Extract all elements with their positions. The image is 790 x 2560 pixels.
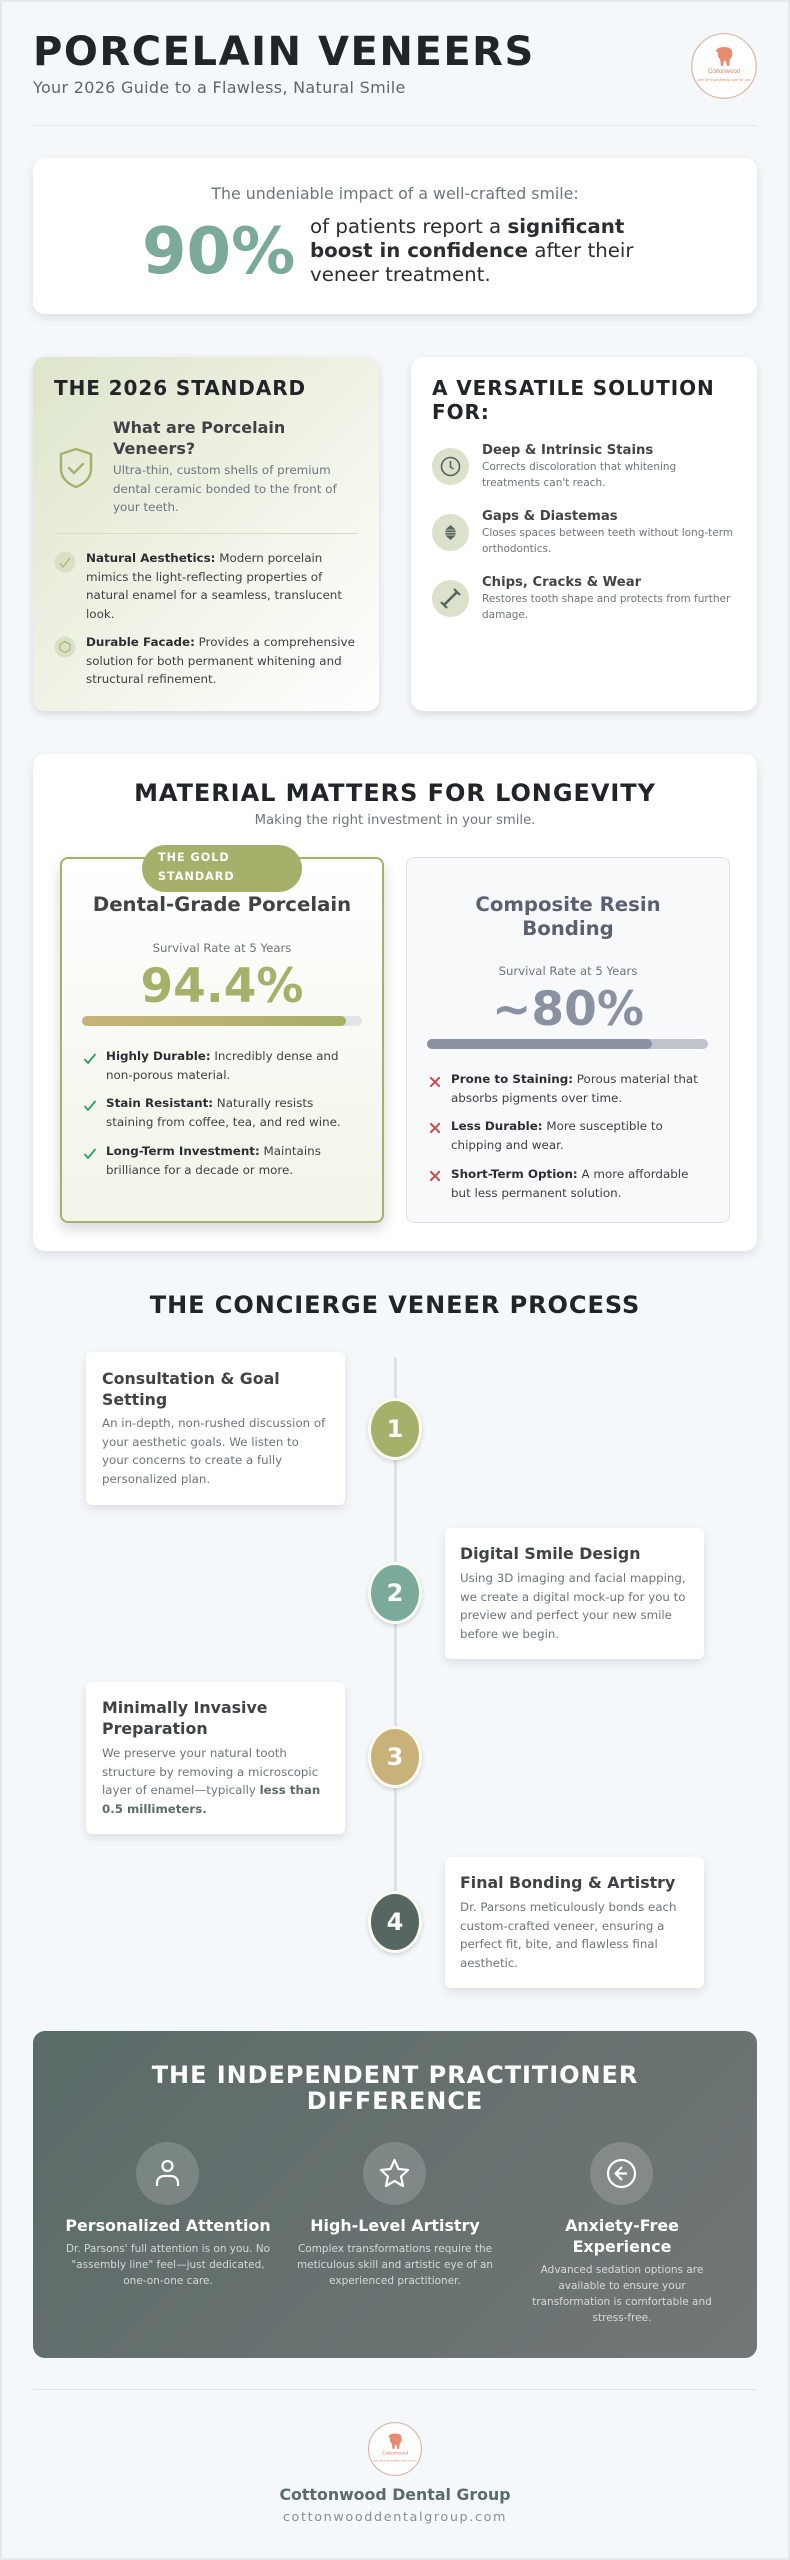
- step 4 text: [460, 1900, 677, 1970]
- drawback: [451, 1167, 688, 1200]
- benefit title: anxiety-free: Anxiety-Free: [565, 2216, 679, 2235]
- item: chips: Chips, Cracks & Wear: [482, 575, 641, 590]
- icon: circled arrow: [590, 2142, 653, 2205]
- porcelain survival label: Survival Rate at 5 Years: [153, 941, 291, 955]
- step 3 text: We preserve your natural tooth: [102, 1746, 287, 1760]
- panel: versatile solution: [411, 357, 757, 711]
- step 2 number: 2: [387, 1579, 403, 1607]
- cross mark: [430, 1077, 440, 1087]
- drawback: chipping and wear.: [451, 1138, 564, 1152]
- composite drawbacks list: [430, 1072, 698, 1200]
- point: natural aesthetics: Natural Aesthetics: Modern porcelain: [86, 551, 322, 565]
- icon: gaps: [432, 514, 469, 551]
- logo: Cottonwood Dental footer: Cottonwood: [382, 2451, 408, 2457]
- benefit: Stain Resistant: Naturally resists: [106, 1096, 313, 1110]
- check mark: [84, 1053, 96, 1064]
- point: natural aesthetics: [86, 551, 342, 620]
- hero statement: of patients report a significant: [310, 215, 624, 238]
- benefit text: anxiety-free: Advanced sedation options are: [541, 2264, 703, 2276]
- step 4 text: aesthetic.: [460, 1956, 518, 1970]
- benefit text: attention: one-on-one care.: [123, 2275, 213, 2287]
- step 3 title: [102, 1698, 267, 1738]
- benefit text: artistry: Complex transformations require the: [298, 2243, 492, 2255]
- hero lead-in: The undeniable impact of a well-crafted smile:: [211, 184, 579, 203]
- definition text: dental ceramic bonded to the front of: [113, 482, 337, 496]
- point: durable facade: structural refinement.: [86, 672, 216, 686]
- composite title: Composite Resin: [475, 893, 661, 916]
- step 3 card: [86, 1682, 345, 1834]
- panel heading: THE INDEPENDENT PRACTITIONER: [152, 2061, 638, 2089]
- icon: hexagon badge: [54, 636, 76, 658]
- porcelain bar: [82, 1016, 362, 1026]
- panel: material comparison: [33, 754, 757, 1251]
- step 2 text: preview and perfect your new smile: [460, 1608, 672, 1622]
- step 3 number: [368, 1726, 422, 1788]
- benefit text: anxiety-free: available to ensure your: [558, 2280, 686, 2292]
- cross mark: [430, 1171, 440, 1181]
- porcelain 94.4%: 94.4%: [140, 959, 304, 1014]
- benefit: Highly Durable: Incredibly dense and: [106, 1049, 338, 1063]
- point: natural aesthetics: look.: [86, 606, 115, 620]
- logo: Cottonwood Dental header: [691, 33, 757, 99]
- heading: THE 2026 STANDARD: [54, 376, 306, 400]
- heading: A VERSATILE SOLUTION: [432, 376, 715, 400]
- panel: dental-grade porcelain: [60, 857, 384, 1223]
- panel heading: DIFFERENCE: [307, 2087, 483, 2115]
- step 4 title: Final Bonding & Artistry: [460, 1873, 675, 1892]
- logo: Cottonwood Dental footer: [368, 2422, 422, 2476]
- hero 90% number: 90%: [142, 215, 295, 289]
- step 1 number: [368, 1398, 422, 1460]
- benefit title: attention: Personalized Attention: [65, 2216, 271, 2235]
- timeline line: [394, 1357, 397, 1932]
- subheading: Veneers?: [113, 439, 195, 458]
- header subtitle: Your 2026 Guide to a Flawless, Natural Smile: [33, 78, 406, 97]
- item: chips description: Restores tooth shape and protects from further: [482, 593, 730, 605]
- step 3 text: [102, 1746, 320, 1816]
- porcelain benefits list: [84, 1049, 341, 1176]
- item: gaps description: [482, 527, 733, 555]
- cross mark: [430, 1123, 440, 1133]
- benefit: brilliance for a decade or more.: [106, 1162, 293, 1176]
- benefit text: attention: Dr. Parsons' full attention is on you. No: [66, 2243, 270, 2255]
- benefit text: anxiety-free: stress-free.: [593, 2312, 651, 2324]
- step 2 card: [445, 1528, 704, 1659]
- item: gaps: Gaps & Diastemas: [482, 509, 618, 524]
- benefit: staining from coffee, tea, and red wine.: [106, 1114, 341, 1128]
- point: durable facade: solution for both permanent whitening and: [86, 654, 342, 668]
- step 2 text: we create a digital mock-up for you to: [460, 1590, 685, 1604]
- item: chips description: damage.: [482, 609, 528, 621]
- benefit text: anxiety-free: transformation is comfortable and: [532, 2296, 712, 2308]
- icon: check badge: [54, 552, 76, 572]
- panel: hero statistic: [33, 158, 757, 314]
- icon: chips: [432, 580, 469, 617]
- step 1 title: [102, 1369, 280, 1409]
- point: natural aesthetics: natural enamel for a seamless, translucent: [86, 588, 342, 602]
- badge: the gold standard: THE GOLD: [158, 851, 230, 864]
- check mark: [84, 1100, 96, 1111]
- benefit: non-porous material.: [106, 1068, 230, 1082]
- benefit text: attention: "assembly line" feel—just dedicated,: [71, 2259, 265, 2271]
- step 3 text: layer of enamel—typically less than: [102, 1783, 320, 1797]
- step 4 number: [368, 1891, 422, 1953]
- badge: the gold standard: STANDARD: [158, 870, 235, 882]
- benefit: Long-Term Investment: Maintains: [106, 1144, 321, 1158]
- drawback: Short-Term Option: A more affordable: [451, 1167, 688, 1181]
- item: stains: Deep & Intrinsic Stains: [482, 443, 653, 458]
- subheading: Making the right investment in your smile.: [255, 813, 535, 828]
- definition text: your teeth.: [113, 500, 179, 514]
- step 3 number: 3: [387, 1743, 403, 1771]
- item: chips description: [482, 593, 730, 621]
- footer url: cottonwooddentalgroup.com: [283, 2510, 507, 2525]
- subheading: [113, 418, 285, 458]
- step 2 text: [460, 1571, 686, 1640]
- hero statement: veneer treatment.: [310, 263, 491, 286]
- item: stains description: Corrects discoloration that whitening: [482, 461, 676, 473]
- step 1 card: [86, 1352, 345, 1505]
- item: gaps description: orthodontics.: [482, 543, 551, 555]
- step 2 text: before we begin.: [460, 1626, 559, 1640]
- step 3 text: structure by removing a microscopic: [102, 1764, 318, 1778]
- step 2 number: [368, 1562, 422, 1624]
- panel heading: [152, 2061, 638, 2115]
- benefit: [106, 1049, 338, 1082]
- heading: [432, 376, 715, 424]
- step 1 title: Setting: [102, 1390, 167, 1409]
- point: durable facade: Durable Facade: Provides a comprehensive: [86, 635, 355, 649]
- benefit text: artistry: [297, 2243, 493, 2287]
- heading: FOR:: [432, 400, 490, 424]
- badge: the gold standard: [142, 845, 302, 892]
- hero statement: [310, 215, 634, 286]
- step 1 text: your concerns to create a fully: [102, 1453, 282, 1467]
- logo: Cottonwood Dental header: Cottonwood: [708, 69, 740, 75]
- step 4 number: 4: [387, 1908, 403, 1936]
- benefit text: artistry: meticulous skill and artistic eye of an: [297, 2259, 493, 2271]
- step 1 text: your aesthetic goals. We listen to: [102, 1434, 299, 1448]
- heading: MATERIAL MATTERS FOR LONGEVITY: [134, 779, 656, 807]
- step 3 text: 0.5 millimeters.: [102, 1802, 207, 1816]
- composite survival label: Survival Rate at 5 Years: [499, 964, 637, 978]
- icon: clock: [432, 448, 469, 485]
- step 1 text: personalized plan.: [102, 1472, 210, 1486]
- hero statement: boost in confidence after their: [310, 239, 634, 262]
- logo: Cottonwood Dental footer: care for your family, care for you: [373, 2458, 417, 2463]
- benefit title: anxiety-free: [502, 2215, 742, 2257]
- step 4 text: custom-crafted veneer, ensuring a: [460, 1918, 664, 1932]
- step 1 text: [102, 1416, 326, 1486]
- benefit text: artistry: experienced practitioner.: [329, 2275, 461, 2287]
- definition text: Ultra-thin, custom shells of premium: [113, 463, 331, 477]
- benefit title: artistry: High-Level Artistry: [310, 2216, 480, 2235]
- item: gaps description: Closes spaces between teeth without long-term: [482, 527, 733, 539]
- point: durable facade: [86, 635, 355, 686]
- icon: person: [136, 2142, 199, 2205]
- step 3 title: Preparation: [102, 1719, 208, 1738]
- process heading: THE CONCIERGE VENEER PROCESS: [150, 1291, 640, 1319]
- composite ~80%: ~80%: [492, 982, 644, 1037]
- benefit: [106, 1144, 321, 1176]
- step 3 title: Minimally Invasive: [102, 1698, 267, 1717]
- porcelain title: Dental-Grade Porcelain: [93, 893, 351, 916]
- panel: independent practitioner: [33, 2031, 757, 2358]
- composite title: [475, 893, 661, 940]
- step 1 title: Consultation & Goal: [102, 1369, 280, 1388]
- composite title: Bonding: [522, 917, 614, 940]
- check mark: [84, 1148, 96, 1159]
- benefit text: anxiety-free: [502, 2262, 742, 2326]
- step 4 text: Dr. Parsons meticulously bonds each: [460, 1900, 677, 1914]
- point: natural aesthetics: mimics the light-reflecting properties of: [86, 570, 322, 584]
- icon: shield check: [60, 448, 92, 488]
- panel: the 2026 standard: [33, 357, 379, 711]
- drawback: [451, 1072, 698, 1104]
- definition text: [113, 463, 338, 514]
- subheading: What are Porcelain: [113, 418, 285, 437]
- benefit text: attention: [66, 2243, 270, 2287]
- panel: composite resin bonding: [406, 857, 730, 1223]
- drawback: [451, 1119, 663, 1152]
- composite bar: [427, 1039, 708, 1049]
- step 2 text: Using 3D imaging and facial mapping,: [460, 1571, 686, 1585]
- item: stains description: [482, 461, 676, 489]
- drawback: but less permanent solution.: [451, 1186, 621, 1200]
- step 1 number: 1: [387, 1415, 403, 1443]
- footer name: Cottonwood Dental Group: [279, 2485, 511, 2504]
- header title: PORCELAIN VENEERS: [33, 29, 535, 75]
- drawback: absorbs pigments over time.: [451, 1090, 622, 1104]
- step 2 title: Digital Smile Design: [460, 1544, 640, 1563]
- drawback: Less Durable: More susceptible to: [451, 1119, 663, 1133]
- drawback: Prone to Staining: Porous material that: [451, 1072, 698, 1086]
- step 4 text: perfect fit, bite, and flawless final: [460, 1937, 658, 1951]
- benefit title: anxiety-free: Experience: [573, 2237, 671, 2256]
- step 4 card: [445, 1857, 704, 1988]
- benefit: [106, 1096, 341, 1128]
- icon: star: [363, 2142, 426, 2205]
- item: stains description: treatments can't reach.: [482, 477, 605, 489]
- step 1 text: An in-depth, non-rushed discussion of: [102, 1416, 325, 1430]
- logo: Cottonwood Dental header: care for your family, care for you: [697, 77, 751, 83]
